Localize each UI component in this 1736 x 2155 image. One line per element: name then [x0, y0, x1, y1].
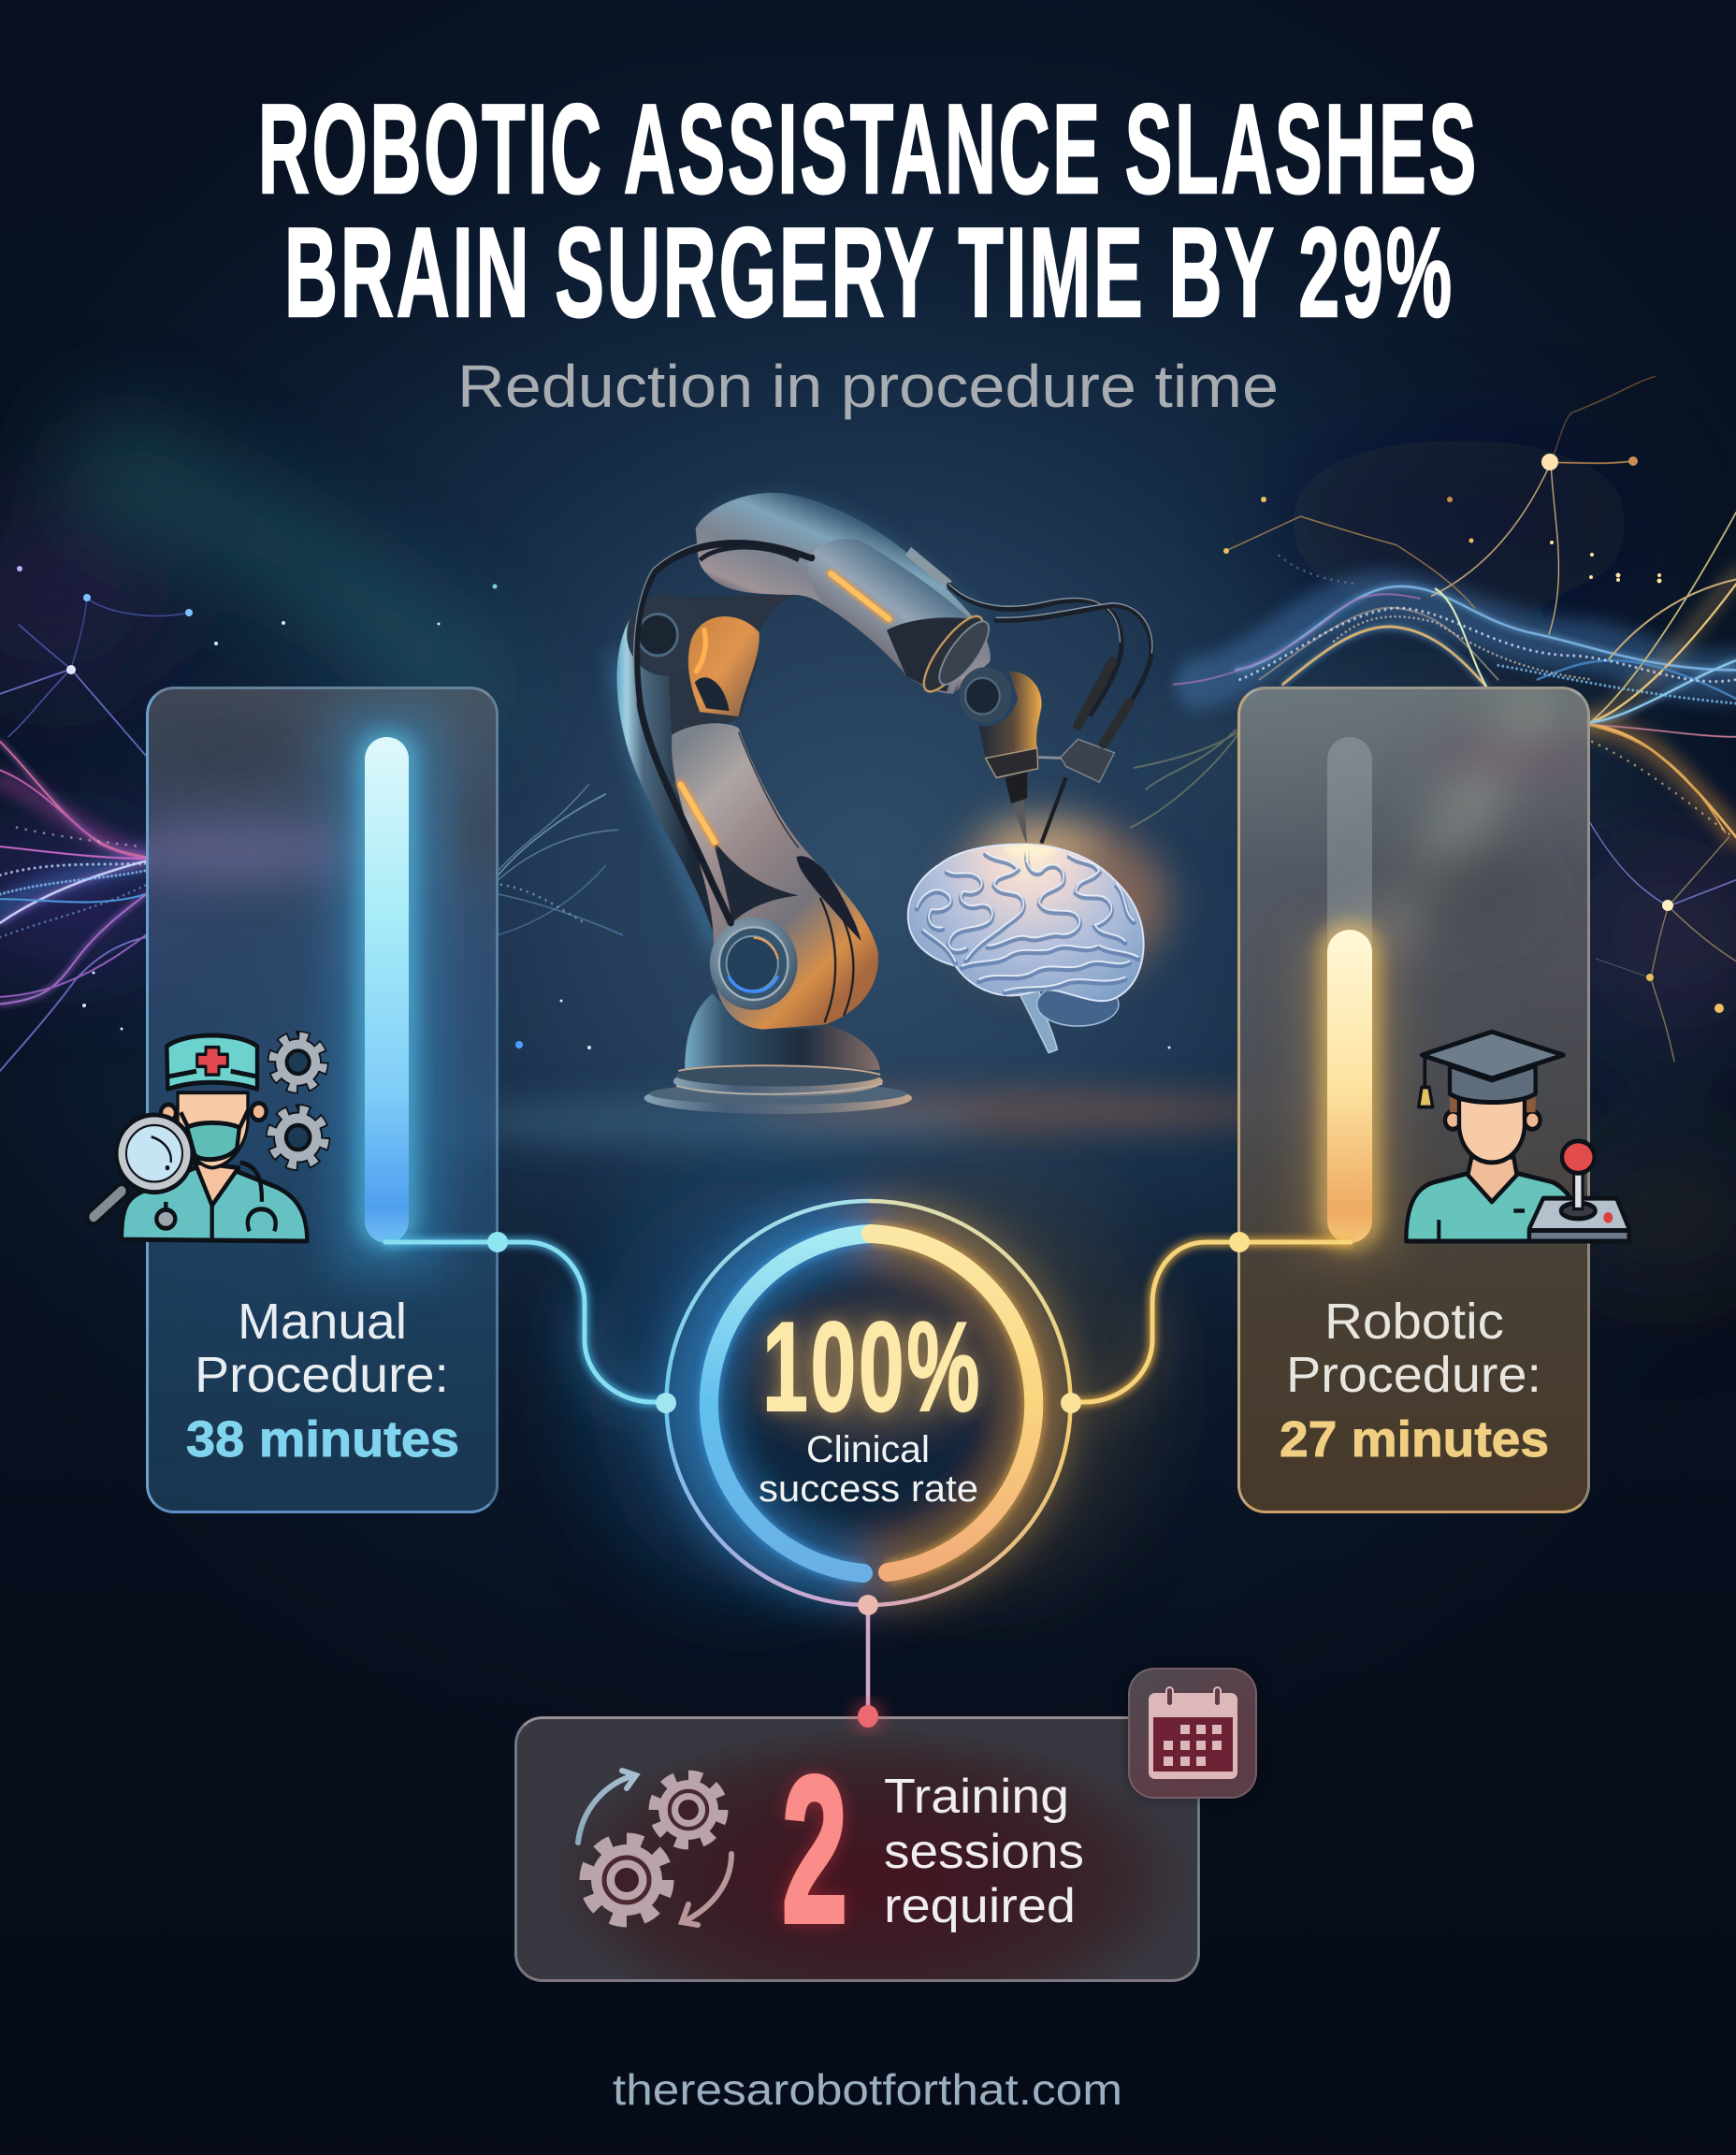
robot cables	[634, 539, 1152, 923]
success rate label: success rate	[759, 1468, 978, 1510]
ring inner glow	[585, 1225, 1152, 1581]
success rate value	[762, 1295, 982, 1438]
icon: gears with cycle arrows	[578, 1771, 731, 1925]
robot main arm	[672, 723, 878, 1029]
training count: 2	[782, 1734, 847, 1966]
glass panel: robotic procedure	[1237, 687, 1590, 1513]
robotic bar with track	[1318, 737, 1382, 1250]
card top node	[855, 1703, 881, 1729]
training count: 2	[782, 1734, 847, 1966]
title	[258, 78, 1479, 343]
robot base	[644, 993, 912, 1114]
calendar tile	[1128, 1668, 1257, 1799]
manual label: Procedure:	[195, 1347, 449, 1403]
right neural waves	[1130, 377, 1736, 1062]
subtitle: Reduction in procedure time	[457, 353, 1279, 420]
robot lower hub	[710, 918, 798, 1010]
robot glow	[620, 507, 975, 947]
floor glow	[440, 1092, 1291, 1147]
manual bar with connector	[355, 730, 419, 1249]
success rate label: Clinical	[806, 1429, 930, 1470]
stars	[17, 454, 1724, 1087]
training label	[884, 1770, 1084, 1933]
manual label	[186, 1294, 459, 1468]
robotic label: Robotic	[1324, 1294, 1504, 1350]
robotic panel haze	[1305, 692, 1599, 1253]
success ring	[666, 1201, 1070, 1605]
footer: theresarobotforthat.com	[613, 2065, 1122, 2114]
glass panel: manual procedure	[146, 687, 499, 1513]
icon: graduate student with joystick	[1406, 1032, 1629, 1241]
robot wrist and tool	[959, 667, 1114, 846]
robot lower arm shell	[617, 599, 743, 938]
manual label: 38 minutes	[186, 1411, 459, 1468]
icon: calendar	[1149, 1687, 1237, 1779]
brain halo	[945, 820, 1168, 984]
infographic layer	[86, 103, 1631, 1706]
illustration: robot arm and brain	[617, 493, 1168, 1114]
success rate label	[759, 1429, 978, 1510]
training label: sessions	[884, 1825, 1084, 1879]
icon: surgeon with magnifier and gears	[94, 1035, 325, 1241]
glass panel: training sessions	[514, 1716, 1200, 1982]
robotic label: 27 minutes	[1280, 1411, 1549, 1468]
success rate value: 100%	[762, 1295, 982, 1438]
brain	[908, 844, 1144, 1053]
manual label: Manual	[238, 1294, 407, 1350]
node dots	[487, 1232, 1250, 1413]
training label: required	[884, 1879, 1076, 1933]
left nebula	[0, 440, 1736, 1300]
training count	[782, 1734, 847, 1966]
left neural waves	[0, 598, 622, 1071]
success rate value: 100%	[762, 1295, 982, 1438]
robotic label	[1280, 1294, 1549, 1468]
robot shoulder joint	[627, 594, 799, 739]
left connector	[383, 1242, 666, 1402]
orange light strips	[681, 573, 889, 843]
link from ring to training card	[858, 1595, 878, 1716]
ring glow	[589, 1179, 1150, 1590]
training label: Training	[884, 1770, 1069, 1824]
robot upper arm	[696, 493, 997, 700]
robotic label: Procedure:	[1286, 1347, 1541, 1403]
faint strands right of manual panel	[499, 794, 605, 875]
right connector	[1071, 1242, 1353, 1402]
manual panel haze	[122, 711, 505, 1272]
